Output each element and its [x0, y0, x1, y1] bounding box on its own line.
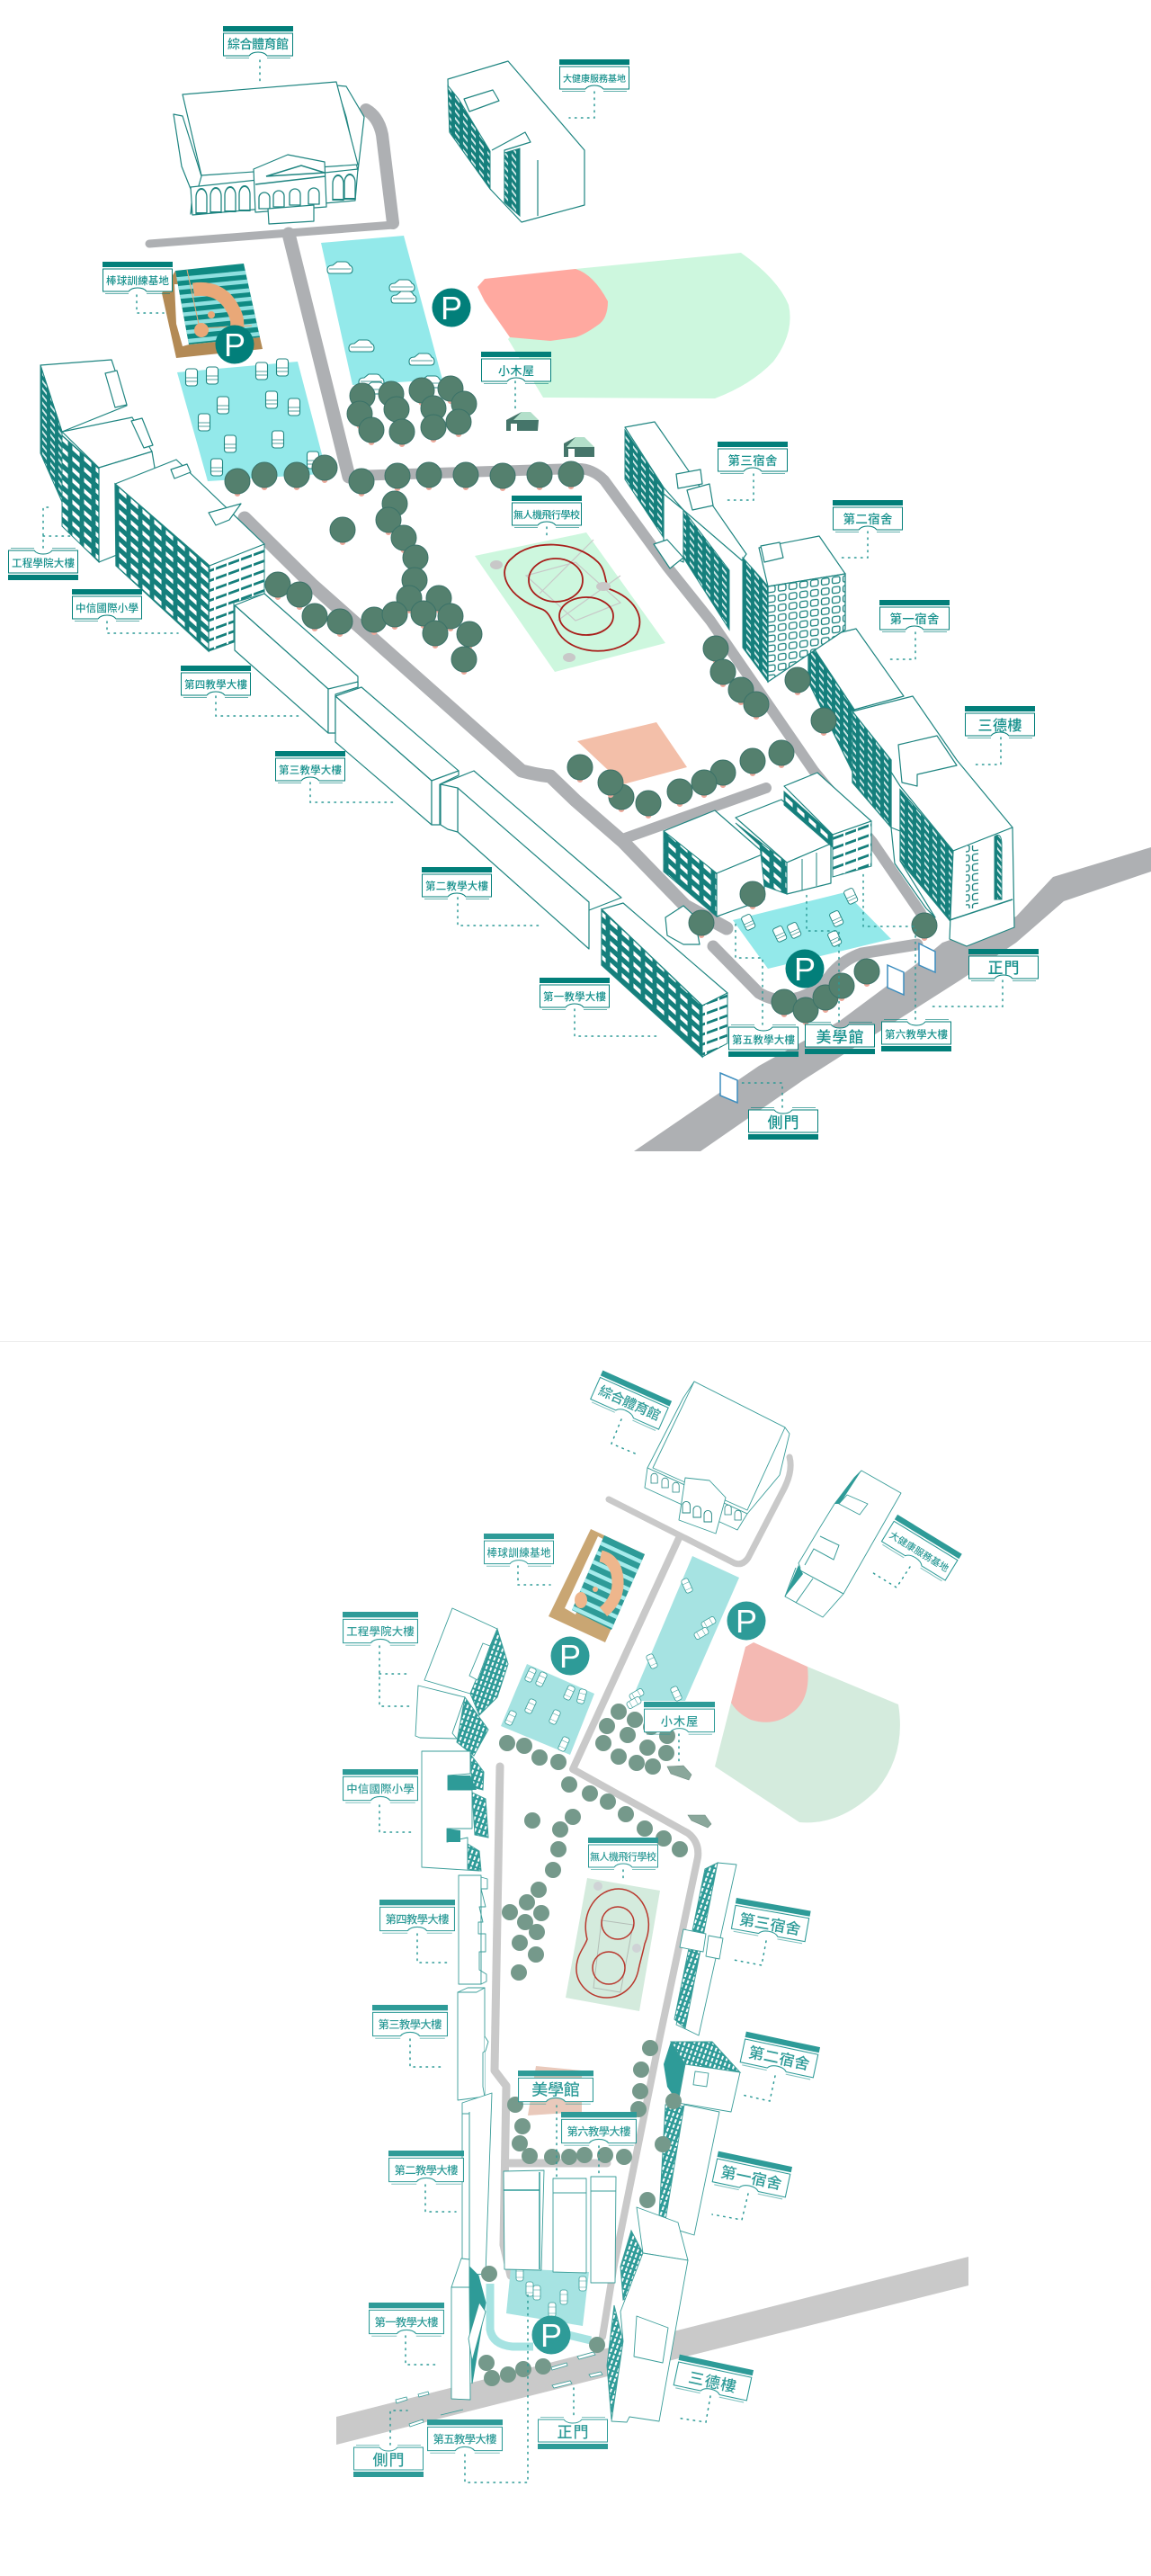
parking markers: P — [224, 326, 245, 363]
label: junior school — [72, 589, 142, 621]
building: aesthetics hall — [736, 800, 831, 894]
building: teaching block 2 — [462, 2093, 492, 2276]
label: drone school — [588, 1838, 658, 1869]
building: engineering college — [415, 1608, 508, 1756]
cars — [185, 262, 859, 947]
label: dorm 1: 第一宿舍 — [890, 612, 940, 626]
label: baseball: 棒球訓練基地 — [106, 274, 169, 287]
label: health services — [880, 1515, 962, 1583]
building: teaching block 4 — [235, 594, 358, 733]
label: main gate — [968, 949, 1039, 980]
label: aesthetics hall: 美學館 — [816, 1028, 863, 1046]
label: block 3 — [372, 2005, 448, 2038]
building: dormitory 3 — [674, 1863, 736, 2035]
top campus map — [8, 26, 1151, 1151]
parking markers — [532, 1601, 766, 2355]
label: dorm 2 — [833, 500, 903, 532]
label: block 1 — [369, 2303, 444, 2336]
label: junior school: 中信國際小學 — [346, 1782, 415, 1795]
label: health services: 大健康服務基地 — [563, 73, 626, 85]
building: teaching block 1 — [602, 903, 727, 1057]
label: drone school: 無人機飛行學校 — [513, 508, 580, 521]
main street — [634, 847, 1151, 1151]
building: dormitory 2 — [743, 536, 845, 682]
buildings: blocks 5, aesthetics hall and 6 — [504, 2170, 616, 2283]
parking lot south — [506, 2268, 589, 2326]
trees — [225, 376, 937, 1025]
label: cabin: 小木屋 — [498, 364, 534, 378]
label: cabin — [481, 352, 551, 383]
parking lot north — [321, 236, 442, 385]
label: cabin: 小木屋 — [661, 1714, 698, 1729]
drone school field — [475, 532, 665, 672]
label: dorm 3: 第三宿舍 — [738, 1910, 802, 1938]
baseball training ground — [549, 1529, 652, 1642]
label: block 5: 第五教學大樓 — [732, 1033, 795, 1046]
label: baseball: 棒球訓練基地 — [486, 1546, 551, 1560]
parking markers: P — [559, 1638, 581, 1675]
cabins — [506, 412, 594, 457]
gates — [396, 2352, 602, 2427]
campus roads — [495, 1457, 790, 2337]
label: block 4 — [379, 1900, 455, 1933]
building: teaching block 2 — [441, 771, 621, 949]
leader lines — [43, 60, 1003, 1107]
label: drone school: 無人機飛行學校 — [590, 1850, 656, 1863]
bottom campus map — [336, 1371, 968, 2482]
building: Sande tower — [607, 2207, 688, 2422]
label: junior school — [343, 1769, 418, 1802]
main street — [336, 2257, 968, 2445]
labels — [343, 1371, 962, 2477]
baseball infield — [477, 269, 608, 341]
label: block 1: 第一教學大樓 — [543, 990, 606, 1003]
campus roads — [149, 110, 921, 1000]
label: block 6 — [881, 1020, 951, 1051]
label: engineering: 工程學院大樓 — [12, 557, 76, 569]
label: dorm 3 — [718, 442, 788, 473]
parking markers: P — [540, 2317, 562, 2354]
building: junior school — [422, 1751, 488, 1871]
label: block 2: 第二教學大樓 — [425, 880, 489, 892]
building: dormitory 1 — [659, 2105, 719, 2235]
label: dorm 1: 第一宿舍 — [719, 2163, 783, 2193]
label: block 2: 第二教學大樓 — [394, 2163, 459, 2177]
label: Sande tower: 三德樓 — [687, 2369, 737, 2396]
baseball infield — [731, 1642, 808, 1722]
cabins — [667, 1766, 711, 1828]
label: side gate — [748, 1108, 818, 1140]
building: gym — [645, 1382, 790, 1534]
label: block 4 — [181, 666, 251, 698]
label: block 3 — [275, 751, 345, 783]
parking markers: P — [794, 951, 816, 988]
label: block 1: 第一教學大樓 — [374, 2315, 439, 2329]
parking markers: P — [441, 290, 462, 326]
label: main gate: 正門 — [558, 2424, 588, 2441]
label: block 6 — [561, 2112, 637, 2145]
building: health services — [785, 1471, 901, 1617]
football field — [715, 1667, 900, 1822]
building: teaching block 6 — [784, 773, 871, 877]
label: drone school — [512, 496, 582, 527]
parking lot north — [631, 1556, 739, 1701]
building: teaching block 3 — [458, 1988, 488, 2100]
label: baseball — [484, 1534, 554, 1566]
label: aesthetics hall — [518, 2071, 593, 2104]
label: dorm 1 — [879, 600, 950, 631]
label: block 4: 第四教學大樓 — [184, 678, 248, 691]
label: junior school: 中信國際小學 — [76, 602, 138, 614]
label: main gate: 正門 — [987, 960, 1020, 977]
label: Sande tower — [673, 2355, 754, 2403]
label: block 4: 第四教學大樓 — [385, 1912, 450, 1926]
building: Sande tower — [852, 696, 1014, 946]
label: gym: 綜合體育館 — [596, 1382, 663, 1424]
gates — [720, 944, 935, 1103]
parking lot west — [177, 362, 323, 481]
building: teaching block 5 — [664, 810, 764, 917]
label: block 6: 第六教學大樓 — [885, 1028, 948, 1041]
baseball training ground — [162, 264, 263, 358]
label: block 3: 第三教學大樓 — [378, 2017, 442, 2031]
parking lot west — [501, 1664, 594, 1755]
label: dorm 2: 第二宿舍 — [843, 512, 893, 526]
leader lines — [379, 1419, 910, 2482]
label: gym: 綜合體育館 — [228, 37, 289, 51]
building: health services — [448, 61, 584, 222]
label: side gate — [353, 2445, 424, 2477]
label: block 1 — [540, 978, 610, 1009]
labels — [8, 26, 1039, 1140]
label: gym — [589, 1371, 672, 1432]
label: block 5 — [728, 1025, 799, 1057]
label: gym — [223, 26, 293, 58]
label: block 2 — [388, 2151, 464, 2184]
label: dorm 3 — [730, 1898, 811, 1944]
label: aesthetics hall — [805, 1022, 875, 1054]
label: health services: 大健康服務基地 — [888, 1529, 951, 1575]
label: Sande tower: 三德樓 — [978, 718, 1022, 734]
drone school field — [566, 1878, 660, 2011]
label: dorm 1 — [711, 2151, 792, 2200]
label: dorm 2 — [739, 2032, 820, 2080]
label: block 6: 第六教學大樓 — [567, 2124, 631, 2138]
label: aesthetics hall: 美學館 — [531, 2081, 580, 2098]
label: dorm 2: 第二宿舍 — [747, 2044, 811, 2073]
building: teaching block 4 — [459, 1875, 487, 1984]
building: dormitory 3 — [625, 422, 746, 630]
label: engineering: 工程學院大樓 — [346, 1624, 415, 1638]
label: block 5: 第五教學大樓 — [433, 2432, 497, 2446]
label: dorm 3: 第三宿舍 — [728, 453, 778, 468]
orange court — [577, 722, 687, 784]
label: block 2 — [422, 867, 492, 899]
building: sports gym — [174, 82, 364, 224]
building: teaching block 3 — [335, 687, 459, 825]
label: Sande tower — [965, 706, 1035, 738]
orange court — [528, 2066, 582, 2115]
building: junior school — [115, 460, 264, 651]
label: cabin — [644, 1702, 715, 1734]
parking markers — [216, 288, 824, 988]
building: dormitory 2 — [664, 2042, 740, 2112]
trees — [478, 1704, 688, 2386]
parking lot south — [733, 892, 891, 969]
building: teaching block 1 — [451, 2258, 486, 2400]
label: baseball — [103, 262, 173, 293]
label: side gate: 側門 — [372, 2452, 405, 2469]
cars — [504, 1578, 717, 2317]
label: health services — [559, 59, 629, 92]
label: engineering — [8, 549, 78, 580]
building: dormitory 1 — [808, 629, 904, 775]
label: engineering — [343, 1612, 418, 1645]
label: block 5 — [427, 2419, 503, 2453]
building: engineering college — [40, 360, 155, 562]
label: side gate: 側門 — [768, 1114, 799, 1131]
south access road — [490, 2284, 591, 2347]
parking markers: P — [736, 1603, 757, 1640]
label: block 3: 第三教學大樓 — [279, 764, 342, 776]
label: main gate — [538, 2418, 608, 2449]
football field — [508, 253, 790, 398]
